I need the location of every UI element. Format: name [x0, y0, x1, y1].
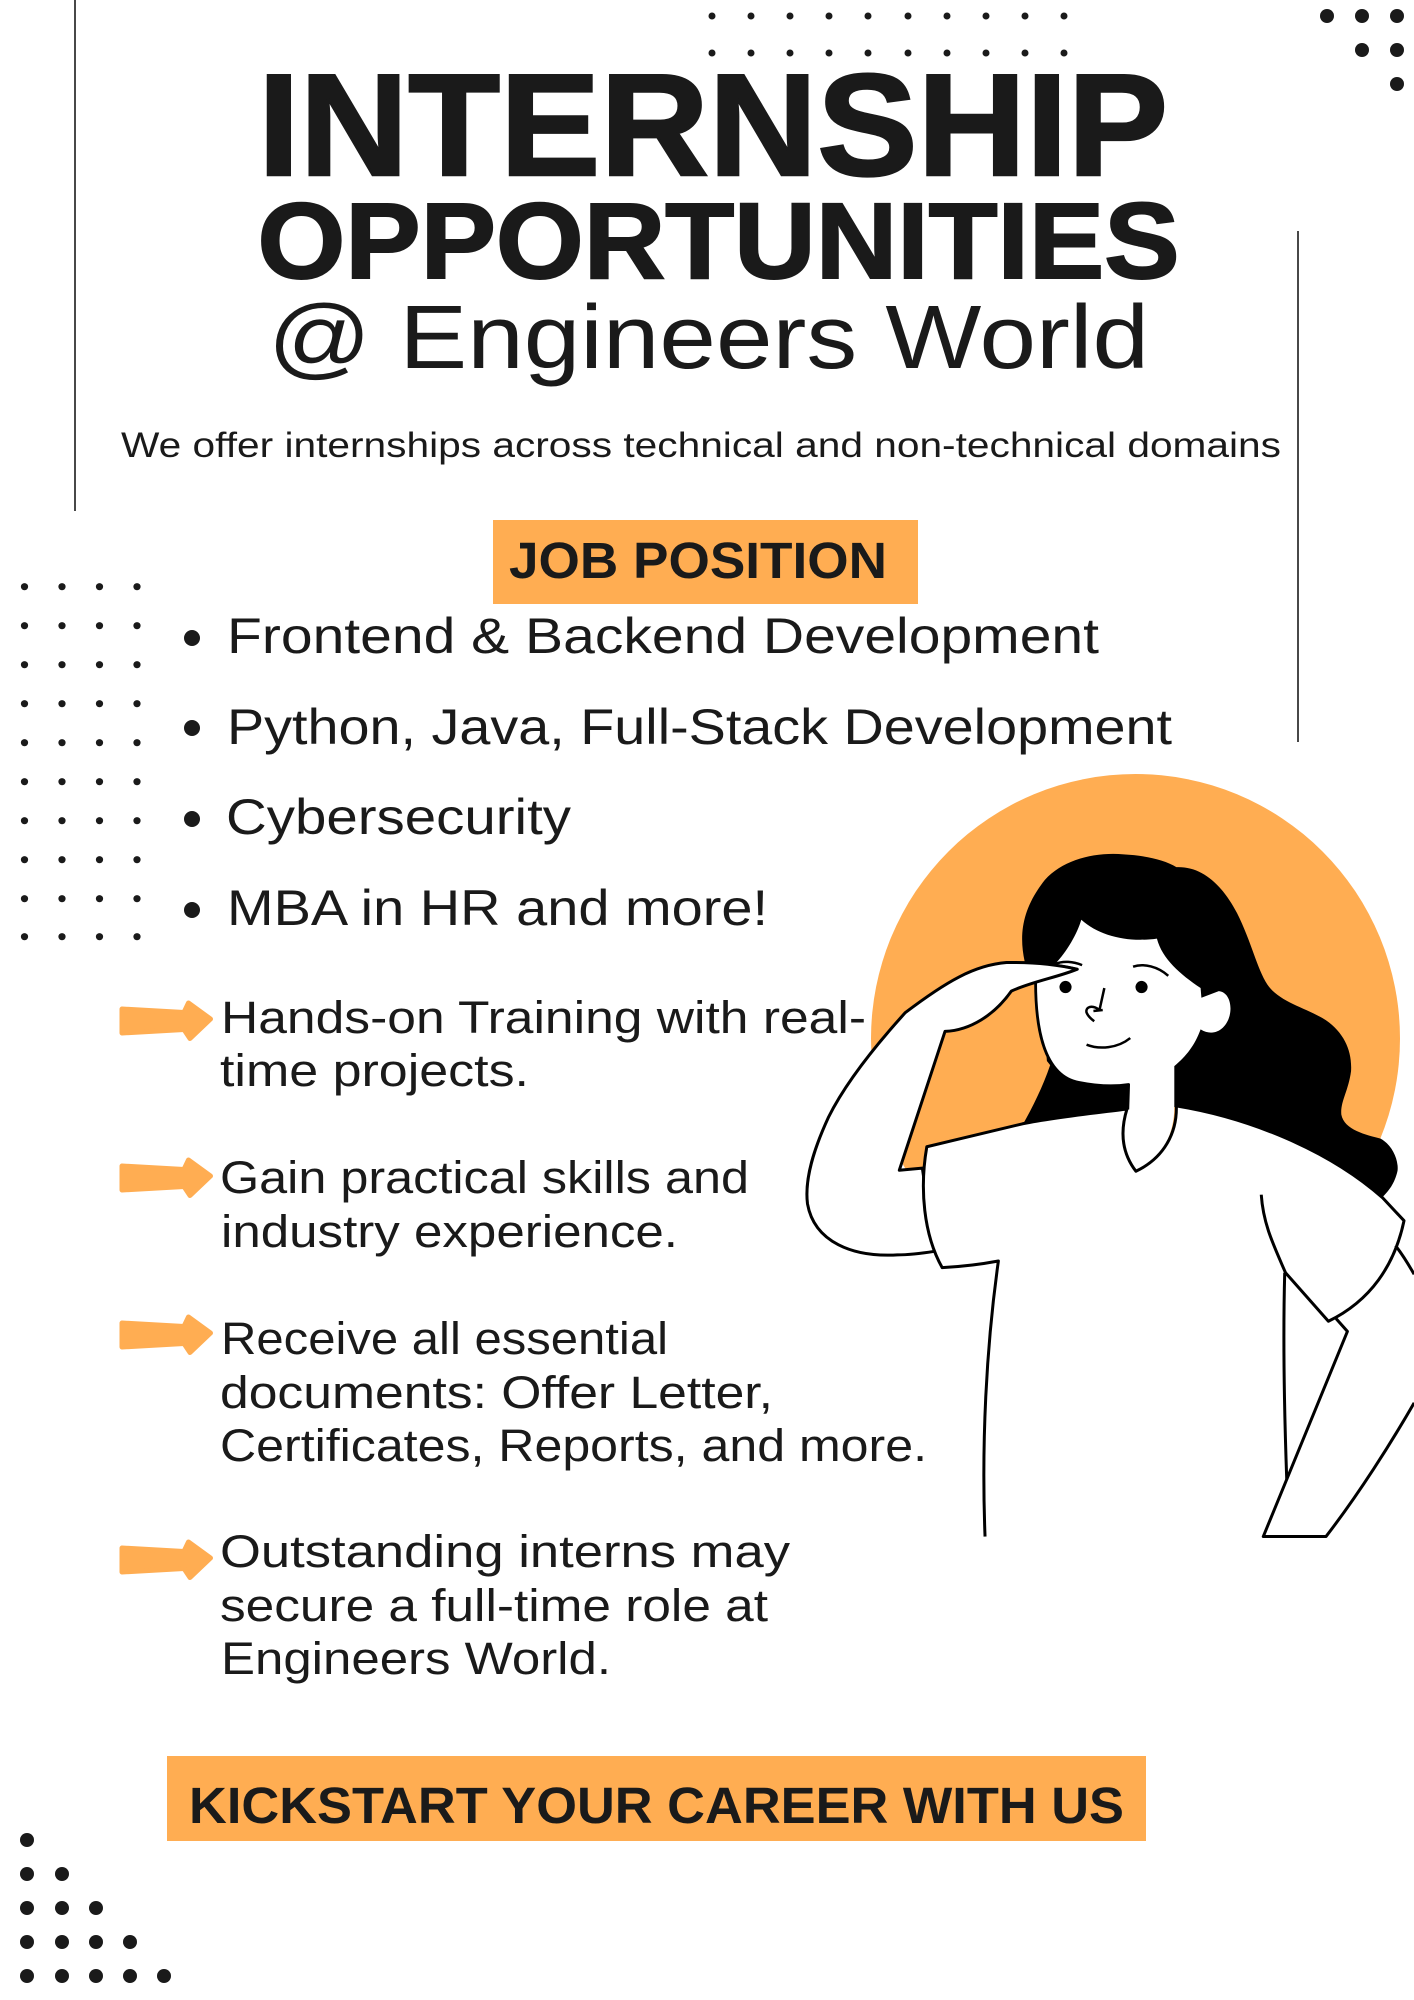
- title: INTERNSHIP: [258, 44, 1168, 206]
- benefit: full-time role: Engineers World.: [221, 1633, 611, 1684]
- list item: cybersecurity: Cybersecurity: [226, 789, 571, 845]
- t-shirt fill: [923, 1106, 1404, 1537]
- dot pattern: top centre: [708, 12, 1068, 56]
- title: OPPORTUNITIES: [258, 180, 1180, 301]
- benefit: full-time role: secure a full-time role at: [220, 1580, 769, 1631]
- hair: [1022, 854, 1398, 1198]
- call to action banner: KICKSTART YOUR CAREER WITH US: [189, 1777, 1124, 1834]
- dot pattern: left: [21, 583, 141, 940]
- thumb: [1055, 962, 1082, 969]
- arrow icon: [122, 1160, 210, 1196]
- benefit: hands-on training: time projects.: [220, 1045, 529, 1096]
- lowered arm: [1263, 1246, 1414, 1537]
- list item: mba in hr: MBA in HR and more!: [227, 880, 768, 936]
- benefit: essential documents: Certificates, Reports, and more.: [220, 1420, 927, 1471]
- call to action banner: [167, 1756, 1146, 1841]
- orange circle: [871, 774, 1400, 1303]
- benefit: essential documents: [122, 1313, 927, 1471]
- woman figure: [807, 854, 1414, 1537]
- dot pattern: top right: [1320, 9, 1404, 91]
- illustration: woman shading her eyes: [807, 774, 1414, 1537]
- face and neck: [1036, 920, 1230, 1171]
- title: @ Engineers World: [268, 288, 1149, 388]
- list item: python java full-stack: Python, Java, Full-Stack Development: [227, 699, 1172, 755]
- dot pattern: bottom left: [20, 1833, 171, 1983]
- benefit: practical skills: industry experience.: [221, 1206, 678, 1257]
- benefit: hands-on training: [122, 992, 866, 1096]
- t-shirt outline: [923, 1106, 1404, 1537]
- benefit: practical skills: [122, 1152, 749, 1257]
- benefit: essential documents: Receive all essential: [221, 1313, 668, 1364]
- job position list: [184, 608, 1172, 936]
- arrow icon: [122, 1542, 210, 1578]
- benefit: practical skills: Gain practical skills and: [220, 1152, 749, 1203]
- benefit: essential documents: documents: Offer Letter,: [220, 1367, 773, 1418]
- arrow icon: [122, 1317, 210, 1352]
- eyes: [1059, 981, 1148, 993]
- heading: job position: [493, 520, 918, 604]
- benefit: hands-on training: Hands-on Training with real-: [221, 992, 866, 1043]
- list item: frontend and backend: Frontend & Backend Development: [227, 608, 1099, 664]
- benefit: full-time role: [122, 1526, 791, 1684]
- heading: job position: JOB POSITION: [509, 532, 887, 589]
- raised arm: [807, 962, 1077, 1255]
- arrow icon: [122, 1003, 210, 1038]
- title: [258, 44, 1180, 388]
- benefit: full-time role: Outstanding interns may: [220, 1526, 791, 1577]
- subtitle: We offer internships across technical and non-technical domains: [121, 426, 1281, 465]
- eyebrow, nose and mouth: [1086, 965, 1168, 1048]
